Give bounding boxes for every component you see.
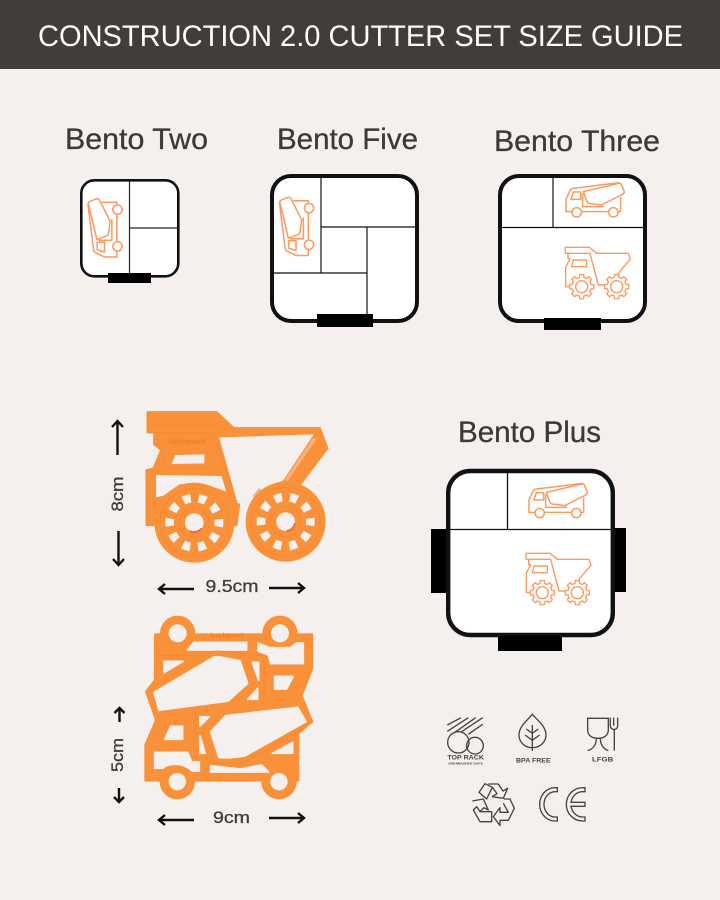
dump truck cookie cutter: lunchpunch [169,437,206,446]
icon: top rack dishwasher safe [447,718,485,765]
icon: top rack dishwasher safe: DISHWASHER SAFE [448,761,483,765]
dimension: mixer height 5cm [108,708,127,802]
heading: Bento Plus: Bento Plus [458,416,601,449]
lunchbox: Bento Two [81,180,178,283]
panel: Bento Three [494,125,660,330]
panel: Bento Plus [431,416,626,651]
certification icons [447,714,618,826]
icon: top rack dishwasher safe: TOP RACK [447,755,485,762]
panel: Bento Five [272,123,418,327]
icon: BPA free leaf [516,714,551,765]
dimension: truck height 8cm [108,421,127,565]
lunchbox: Bento Three [500,176,645,330]
icon: mixer truck cutter position [88,199,122,257]
icon: CE mark [540,788,585,821]
mixer truck cookie cutter [145,617,312,798]
dump truck cookie cutter [146,412,328,563]
icon: recycling [472,784,514,826]
heading: Bento Two: Bento Two [65,123,208,156]
icon: LFGB food safe [588,718,618,764]
dimension: truck width 9.5cm [159,576,304,596]
icon: mixer truck cutter position [279,197,314,255]
icon: LFGB food safe: LFGB [592,757,614,764]
panel: Bento Two [65,123,208,283]
icon: dump truck cutter position [526,553,591,605]
title: CONSTRUCTION 2.0 CUTTER SET SIZE GUIDE [38,20,683,53]
icon: mixer truck cutter position [529,483,587,518]
icon: mixer truck cutter position [566,183,624,217]
lunchbox: Bento Plus [431,471,626,651]
icon: BPA free leaf: BPA FREE [516,758,551,765]
icon: dump truck cutter position [565,247,630,299]
dimension: mixer width 9cm: 9cm [213,808,250,827]
header banner [0,0,720,69]
heading: Bento Three: Bento Three [494,125,660,158]
dimension: truck height 8cm: 8cm [108,476,127,512]
mixer truck cookie cutter: lunchpunch [210,632,245,639]
dimension: mixer width 9cm [159,808,304,827]
lunchbox: Bento Five [272,176,417,327]
dimension: mixer height 5cm: 5cm [108,738,127,772]
dimension: truck width 9.5cm: 9.5cm [206,576,258,596]
heading: Bento Five: Bento Five [277,123,418,156]
